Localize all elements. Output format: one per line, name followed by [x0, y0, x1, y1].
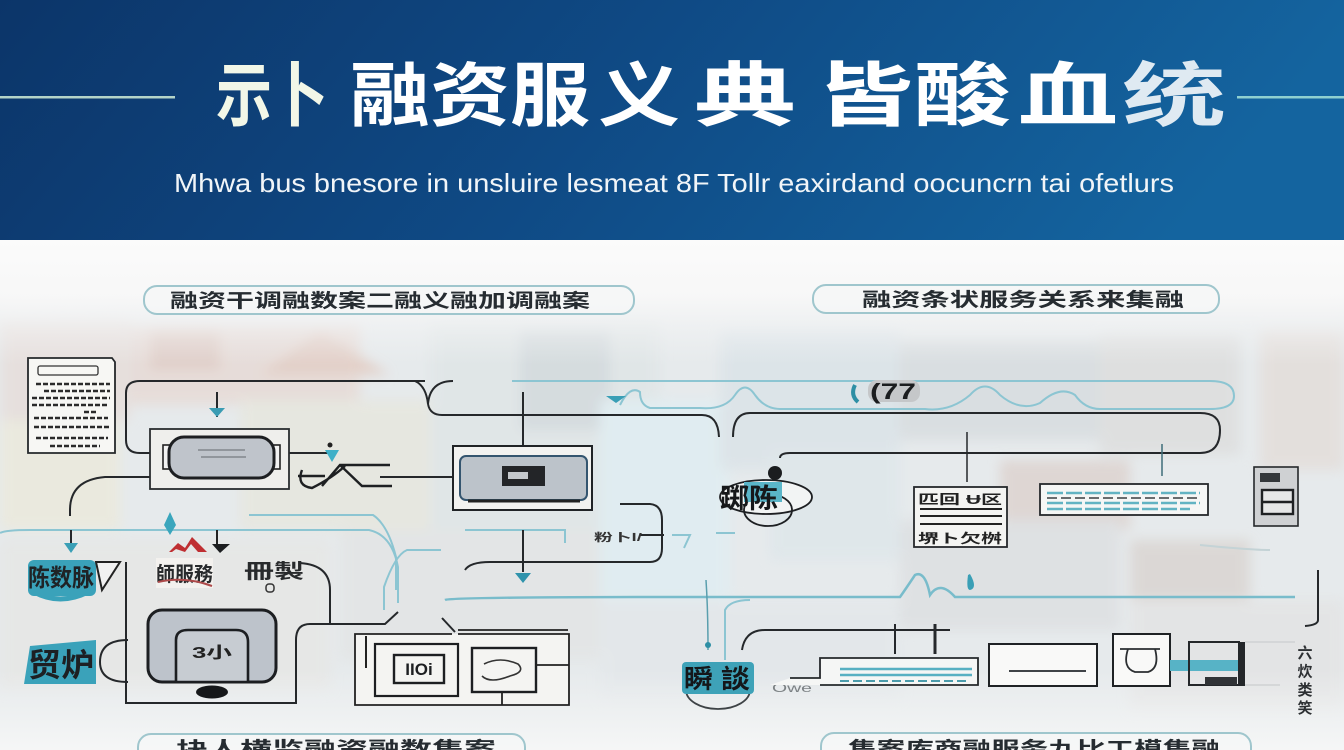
- title: 血: [1018, 57, 1118, 135]
- title: 示卜: [216, 57, 328, 135]
- arrow: teal marker on lower line: [967, 574, 974, 590]
- title: 统: [1122, 57, 1226, 135]
- decorative title rule: right: [1237, 96, 1344, 98]
- monitor device: 3小: [192, 644, 232, 662]
- white fade band under header: [0, 240, 1344, 365]
- device box: capsule: [150, 429, 289, 489]
- teal panel: [1170, 642, 1295, 686]
- pill heading: top right: 融资条状服务关系来集融: [862, 289, 1184, 311]
- sidebar widget: [1254, 467, 1298, 526]
- arrow: down to badge: [64, 530, 78, 553]
- arrow: down to capsule box: [209, 392, 225, 417]
- node: speech badge upper: 踯陈: [720, 484, 778, 514]
- node: speech badge upper: [720, 466, 812, 526]
- black connector lines: [70, 381, 1318, 703]
- title: 皆酸: [816, 57, 1011, 135]
- subtitle: Mhwa bus bnesore in unsluire lesmeat 8F Tollr eaxirdand oocuncrn tai ofetlurs: [174, 168, 1174, 198]
- pill heading: bottom left: [138, 734, 525, 750]
- pill heading: bottom right: [821, 733, 1251, 750]
- teal connector lines: [0, 381, 1295, 660]
- node: speech badge lower: [682, 642, 754, 709]
- node icon: garbled badge left: [28, 560, 120, 599]
- node icon: striped label right: 冊製: [244, 560, 304, 583]
- arrow: teal marker: [164, 512, 176, 535]
- label: garbled code box: IIOi: [405, 660, 433, 679]
- bar block: teal lines: [770, 658, 978, 685]
- node icon: garbled badge left: 陈数脉: [28, 565, 94, 592]
- teal arrow: down mid: [515, 573, 531, 583]
- title: 义: [598, 57, 680, 135]
- decorative title rule: left: [0, 96, 175, 98]
- connector icon: knot: [298, 442, 392, 488]
- pill heading: top left: 融资干调融数案二融义融加调融案: [170, 289, 590, 312]
- empty panel with line: [989, 644, 1097, 686]
- arrow: teal small right: [606, 396, 626, 403]
- label: garbled code box: [394, 655, 444, 683]
- table block: 匹回 Ʉ区: [918, 492, 1002, 507]
- title: 融资服: [350, 57, 590, 135]
- background: faded cityscape: [0, 240, 1344, 750]
- monitor device: [148, 610, 276, 698]
- table block: 堺ト欠桝: [918, 531, 1002, 546]
- node icon: striped label right: [244, 560, 304, 592]
- title: 典: [694, 57, 796, 135]
- panel: lower centre device: [355, 630, 569, 705]
- icon panel: vase: [1113, 634, 1170, 686]
- bottom fade: [0, 670, 1344, 750]
- device box: tablet: [453, 446, 592, 510]
- table block: [914, 487, 1007, 547]
- small note text: Owe: [772, 681, 813, 695]
- pill heading: top left: [144, 286, 634, 314]
- vertical scribble label: 六炊类笑: [1296, 645, 1312, 716]
- text strip block: [1040, 484, 1208, 515]
- node: speech badge lower: 瞬 談: [684, 664, 750, 694]
- pill heading: top right: [813, 285, 1219, 313]
- title: [216, 57, 1226, 135]
- centre chip on teal line: [853, 379, 920, 404]
- red mountain icon: [169, 530, 230, 553]
- node icon: garbled badge lower left: 贸炉: [28, 647, 94, 683]
- scribble label: centre: 粉卜ӏ/: [594, 530, 642, 544]
- header banner: [0, 0, 1344, 240]
- centre chip on teal line: (77: [870, 379, 916, 404]
- node icon: striped label: 師服務: [156, 563, 213, 586]
- document icon: [28, 358, 115, 453]
